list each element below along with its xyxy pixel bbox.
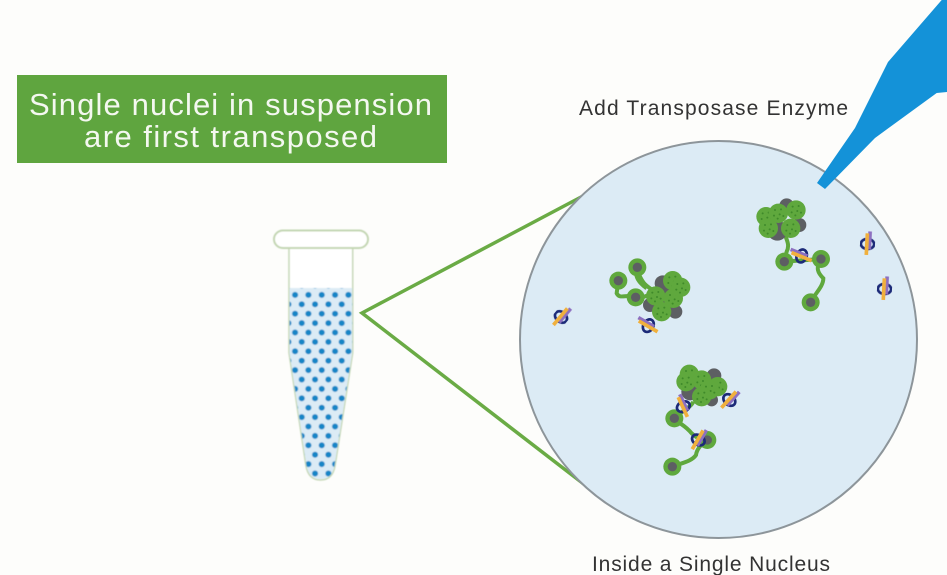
- title banner: Single nuclei in suspension: [29, 87, 432, 122]
- free transposase left: [549, 303, 574, 330]
- title banner: are first transposed: [84, 119, 377, 154]
- label: add transposase enzyme: Add Transposase Enzyme: [579, 97, 848, 120]
- chromatin cluster bottom: [663, 365, 743, 476]
- icon: microcentrifuge tube: [274, 230, 368, 480]
- chromatin cluster top right: [756, 198, 830, 311]
- magnified nucleus circle: [520, 141, 917, 538]
- zoom lines from tube to circle: [362, 196, 585, 485]
- free transposase right: [877, 276, 892, 300]
- liquid with nuclei dots: [290, 288, 352, 479]
- chromatin cluster left: [609, 258, 690, 337]
- nuclei dots: [290, 288, 352, 479]
- free transposase top right: [860, 231, 875, 255]
- title banner: [17, 75, 447, 163]
- icon: pipette tip: [817, 0, 947, 189]
- tube cap: [274, 230, 368, 248]
